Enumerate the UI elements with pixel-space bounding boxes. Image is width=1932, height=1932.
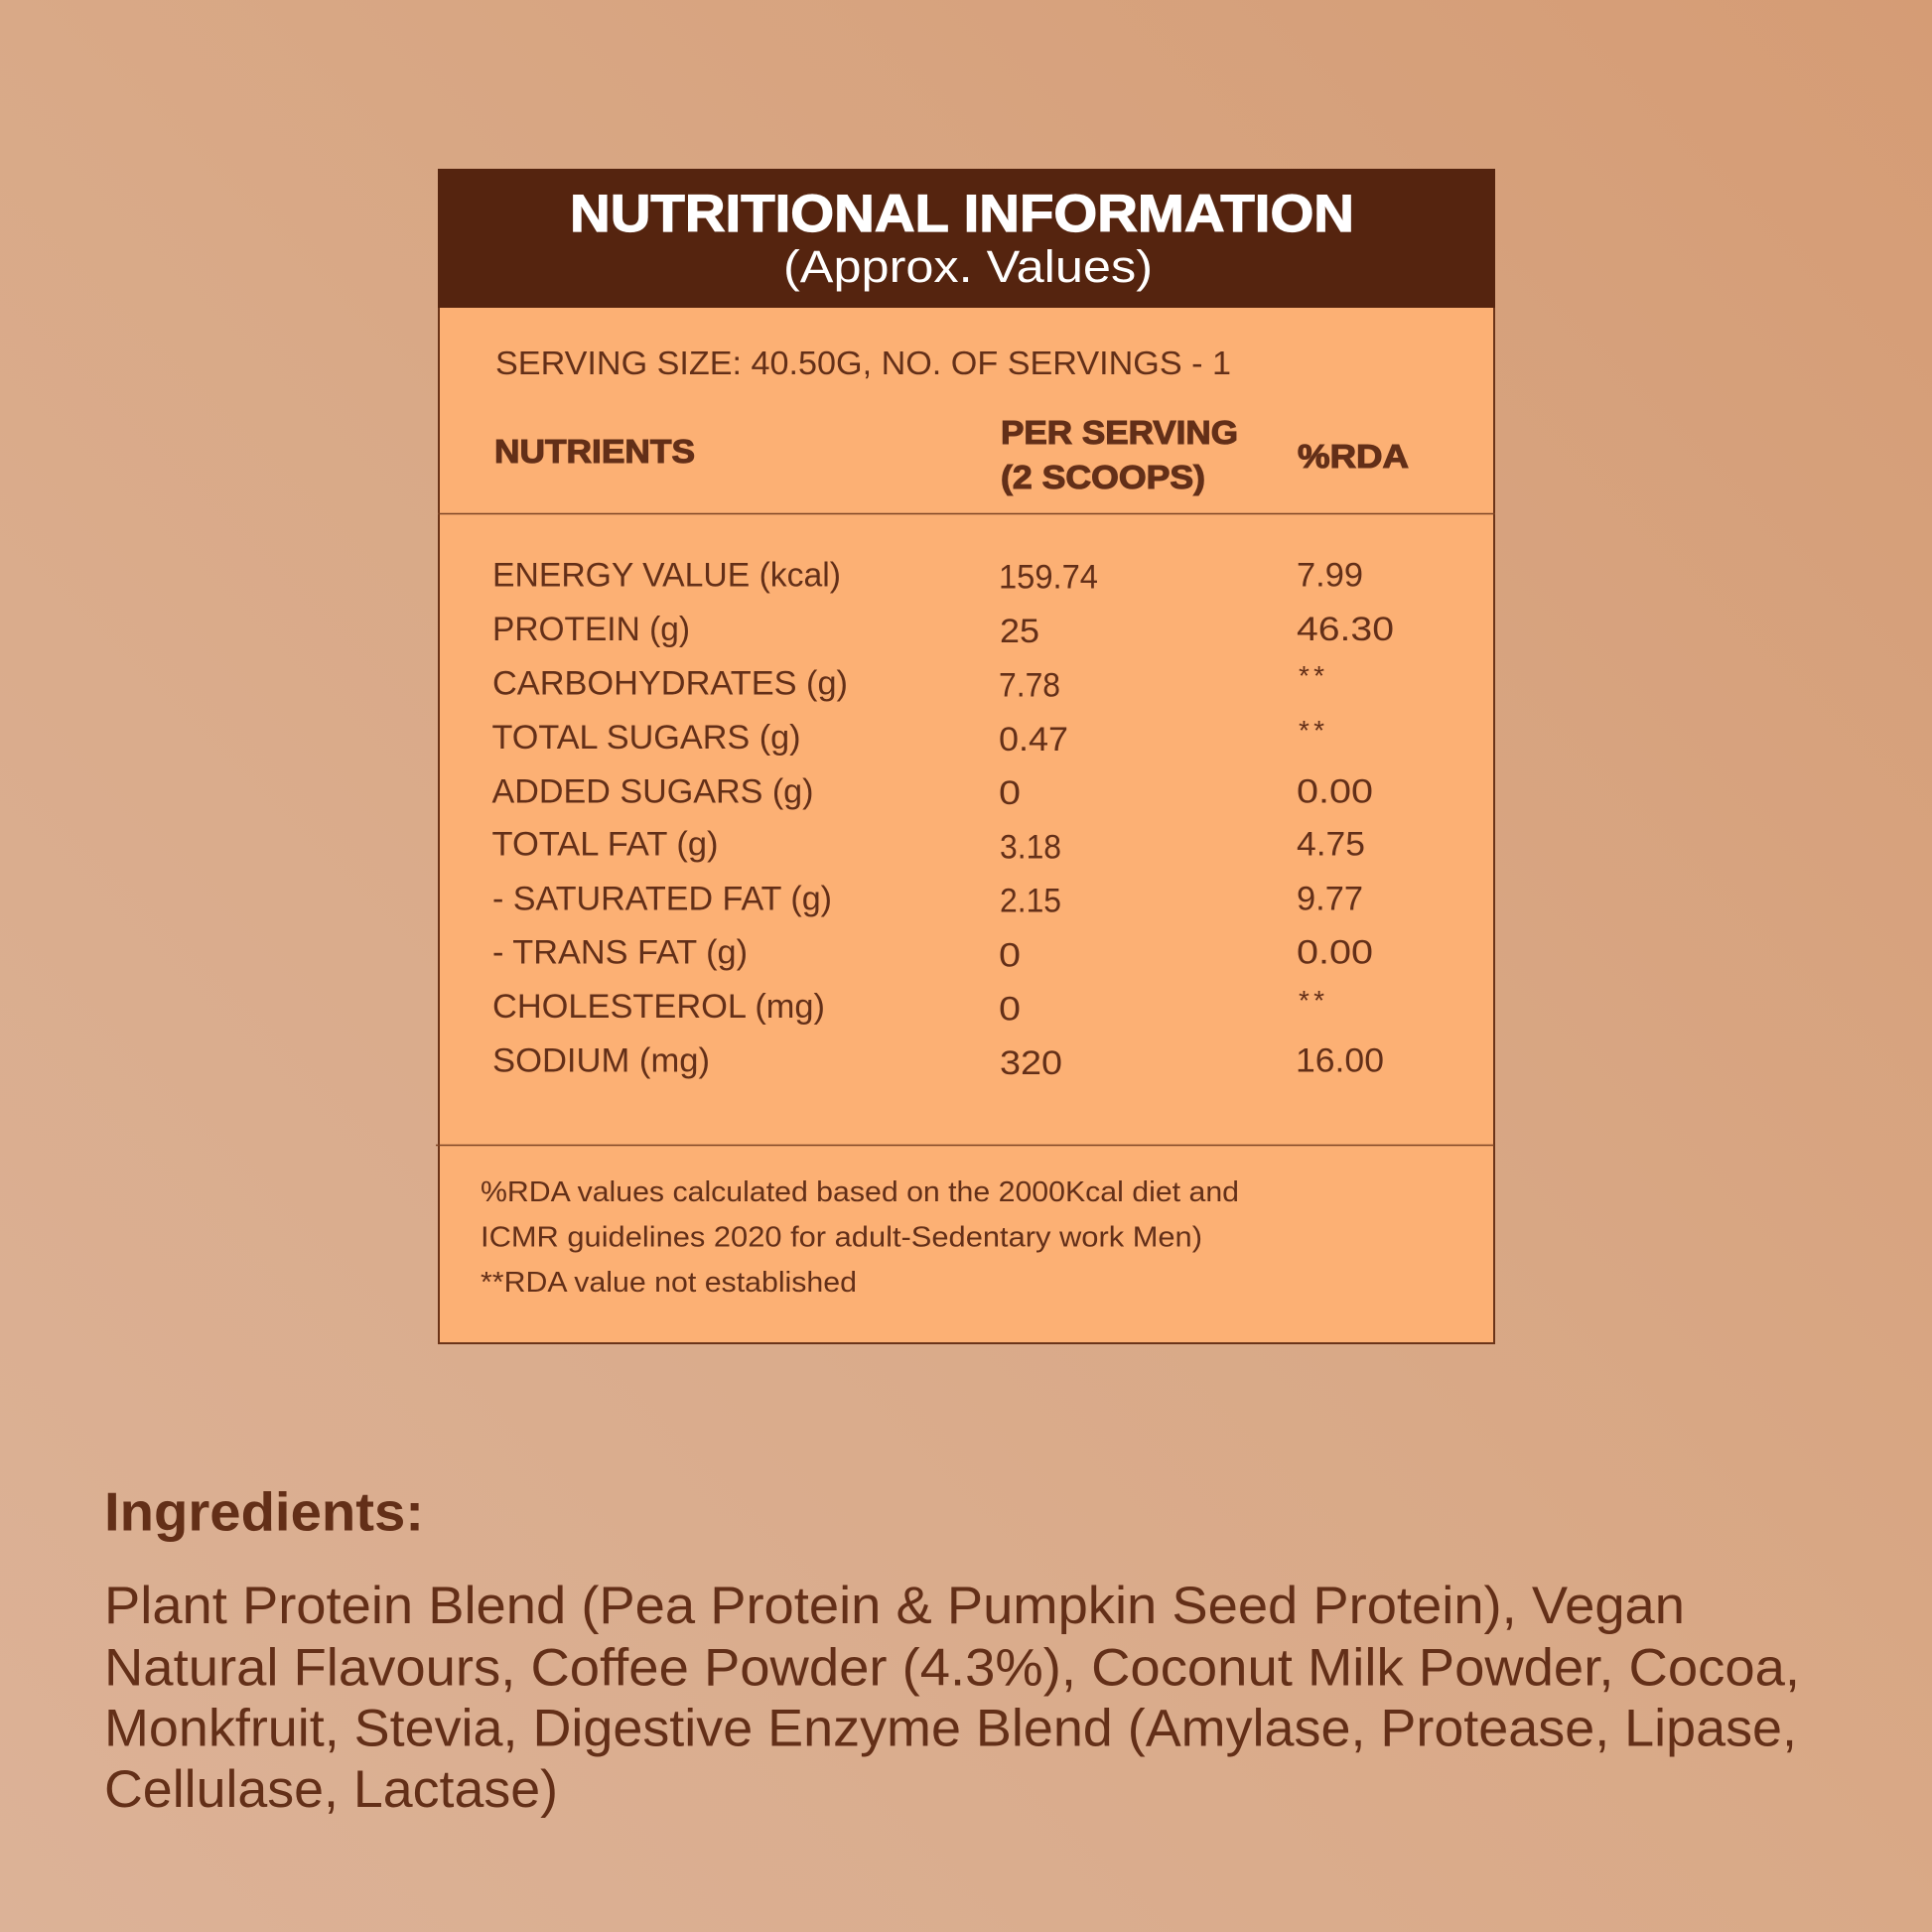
heading: ingredients: Ingredients: <box>104 1481 424 1543</box>
ingredients body text <box>104 1577 1800 1819</box>
percent RDA values column: ** <box>1299 985 1324 1016</box>
per serving values column: 7.78 <box>999 667 1060 705</box>
table column headers: NUTRIENTS <box>494 433 695 470</box>
subheading: approx values: (Approx. Values) <box>783 241 1153 292</box>
per serving values column: 320 <box>1000 1044 1062 1082</box>
table column headers: %RDA <box>1298 438 1409 475</box>
per serving values column <box>999 559 1098 1082</box>
percent RDA values column: 4.75 <box>1297 826 1365 864</box>
table column headers <box>494 414 1409 495</box>
table column headers: PER SERVING <box>1001 414 1238 451</box>
panel header <box>438 169 1495 308</box>
nutrient names column <box>492 557 848 1079</box>
footnotes: %RDA values calculated based on the 2000Kcal diet and <box>481 1176 1239 1208</box>
nutrient names column: ENERGY VALUE (kcal) <box>492 557 841 595</box>
ingredients body text: Natural Flavours, Coffee Powder (4.3%), Coconut Milk Powder, Cocoa, <box>104 1638 1800 1698</box>
per serving values column: 2.15 <box>1000 883 1061 920</box>
per serving values column: 25 <box>1000 613 1039 650</box>
nutrient names column: TOTAL SUGARS (g) <box>492 719 800 757</box>
ingredients body text: Plant Protein Blend (Pea Protein & Pumpkin Seed Protein), Vegan <box>104 1577 1685 1635</box>
percent RDA values column: ** <box>1299 660 1324 691</box>
serving size: SERVING SIZE: 40.50G, NO. OF SERVINGS - 1 <box>495 345 1231 381</box>
nutrient names column: ADDED SUGARS (g) <box>492 772 814 810</box>
heading: nutritional information: NUTRITIONAL INFORMATION <box>570 185 1354 243</box>
nutrient names column: PROTEIN (g) <box>492 611 690 648</box>
ingredients body text: Cellulase, Lactase) <box>104 1760 558 1819</box>
ingredients section <box>104 1481 1800 1819</box>
per serving values column: 3.18 <box>1000 828 1061 866</box>
per serving values column: 0 <box>999 936 1021 974</box>
percent RDA values column: 0.00 <box>1297 772 1373 810</box>
table column headers: (2 SCOOPS) <box>1001 459 1205 495</box>
ingredients body text: Monkfruit, Stevia, Digestive Enzyme Blend (Amylase, Protease, Lipase, <box>104 1700 1797 1757</box>
percent RDA values column: 9.77 <box>1297 881 1363 918</box>
panel: nutrition table <box>436 169 1495 1343</box>
footnotes: ICMR guidelines 2020 for adult-Sedentary work Men) <box>481 1222 1202 1254</box>
footnotes: **RDA value not established <box>481 1267 857 1299</box>
percent RDA values column: ** <box>1299 715 1324 746</box>
nutrient names column: CHOLESTEROL (mg) <box>492 988 825 1026</box>
nutrient names column: - TRANS FAT (g) <box>492 934 748 972</box>
per serving values column: 0 <box>999 991 1021 1029</box>
percent RDA values column: 0.00 <box>1297 934 1373 972</box>
per serving values column: 0.47 <box>999 721 1068 759</box>
nutrient names column: TOTAL FAT (g) <box>492 826 719 864</box>
percent RDA values column: 46.30 <box>1297 611 1394 648</box>
footnotes <box>481 1176 1239 1299</box>
percent RDA values column: 16.00 <box>1296 1041 1384 1079</box>
percent RDA values column: 7.99 <box>1297 557 1363 595</box>
nutrient names column: CARBOHYDRATES (g) <box>492 665 848 703</box>
nutrient names column: - SATURATED FAT (g) <box>492 881 832 918</box>
percent RDA values column <box>1296 557 1394 1079</box>
per serving values column: 0 <box>999 774 1021 812</box>
per serving values column: 159.74 <box>999 559 1098 597</box>
nutrient names column: SODIUM (mg) <box>492 1041 710 1079</box>
